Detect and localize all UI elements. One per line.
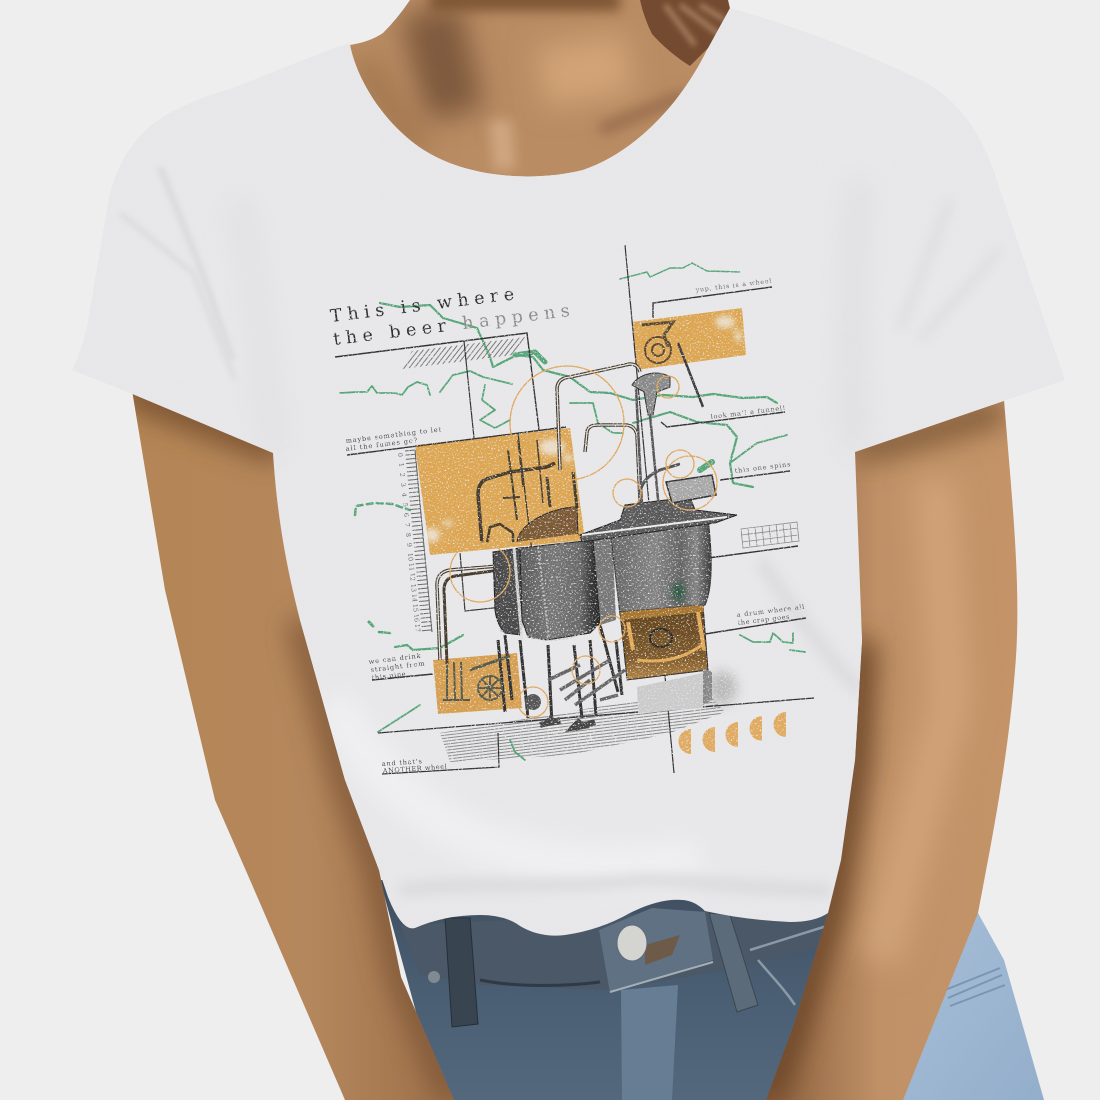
ruler: 14 xyxy=(410,593,419,602)
furnace xyxy=(620,605,708,680)
ruler: 12 xyxy=(408,572,417,581)
callout: pipe xyxy=(368,652,425,682)
jeans xyxy=(380,880,1044,1100)
callout: fumes: all the fumes go? xyxy=(345,436,418,453)
neck and chest skin xyxy=(350,0,730,176)
ruler: 10 xyxy=(406,552,415,561)
title: This is where xyxy=(329,285,515,327)
belt loop left xyxy=(445,918,478,1027)
right tank xyxy=(610,518,711,615)
left tank xyxy=(520,540,600,640)
wheel machine xyxy=(642,322,703,407)
spinning basket xyxy=(666,475,716,503)
brewery apparatus xyxy=(437,322,737,732)
callout: funnel: look ma'! a funnel! xyxy=(710,404,786,421)
green squiggles xyxy=(340,263,805,760)
ruler: 7 xyxy=(403,522,411,527)
grid xyxy=(741,522,799,548)
jeans button xyxy=(617,925,680,965)
pipes xyxy=(437,364,640,664)
hair xyxy=(640,0,731,66)
middle tank xyxy=(590,530,616,625)
ground hatching xyxy=(440,690,725,762)
ruler: 15 xyxy=(411,603,420,612)
spray shadow xyxy=(707,671,737,705)
tank seams xyxy=(527,520,692,640)
platform xyxy=(580,497,737,542)
callout: drum: a drum where all xyxy=(736,603,805,619)
ruler: 17 xyxy=(413,623,422,632)
ruler: 0 xyxy=(396,452,404,457)
distressed paint specks xyxy=(424,316,741,542)
tank grain xyxy=(493,526,711,640)
callout: another wheel: ANOTHER wheel xyxy=(382,763,447,775)
ruler: 13 xyxy=(409,583,418,592)
ruler xyxy=(396,450,432,632)
ruler: 1 xyxy=(397,462,405,467)
orange panel: lower left xyxy=(433,653,522,714)
orange panel: wheel xyxy=(632,308,746,370)
callout: another wheel xyxy=(382,757,447,775)
ruler: 4 xyxy=(400,492,408,497)
t-shirt xyxy=(116,8,1006,936)
callout: wheel: yup, this is a wheel xyxy=(694,278,772,294)
title: the beer happens xyxy=(332,301,571,350)
callout: drum xyxy=(736,603,805,627)
legs and lower pipework xyxy=(498,625,625,728)
orange circles xyxy=(450,366,717,717)
ruler: 9 xyxy=(405,542,413,547)
ruler: 16 xyxy=(412,613,421,622)
orange rim line xyxy=(487,535,578,547)
printed design xyxy=(329,245,814,775)
right arm xyxy=(766,400,1017,1100)
belt loop right xyxy=(709,913,758,1012)
ruler: 8 xyxy=(404,532,412,537)
callout: another wheel: and that's xyxy=(382,757,422,768)
side pipe xyxy=(514,548,522,640)
ruler: 6 xyxy=(402,512,410,517)
funnel xyxy=(632,373,670,415)
copper dome xyxy=(517,507,578,543)
orange panel: main xyxy=(415,428,585,555)
pump machine xyxy=(442,656,510,700)
furnace base xyxy=(637,673,703,713)
moon phases xyxy=(678,712,786,754)
hatched bar xyxy=(402,337,525,369)
ruler: 5 xyxy=(401,502,409,507)
dark ink patch xyxy=(672,583,684,601)
callout: drum: the crap goes xyxy=(737,613,790,627)
callout: spins: this one spins xyxy=(734,460,791,475)
callout: pipe: straight from xyxy=(370,659,425,674)
callout: fumes: maybe something to let xyxy=(345,425,442,445)
callout: pipe: we can drink xyxy=(368,652,421,666)
ruler: 3 xyxy=(399,482,407,487)
ruler: 11 xyxy=(407,562,416,571)
ruler: 2 xyxy=(398,472,406,477)
callout: pipe: this pipe xyxy=(371,670,406,682)
frame lines xyxy=(335,245,814,774)
left arm xyxy=(125,390,454,1100)
back tank xyxy=(493,548,522,635)
